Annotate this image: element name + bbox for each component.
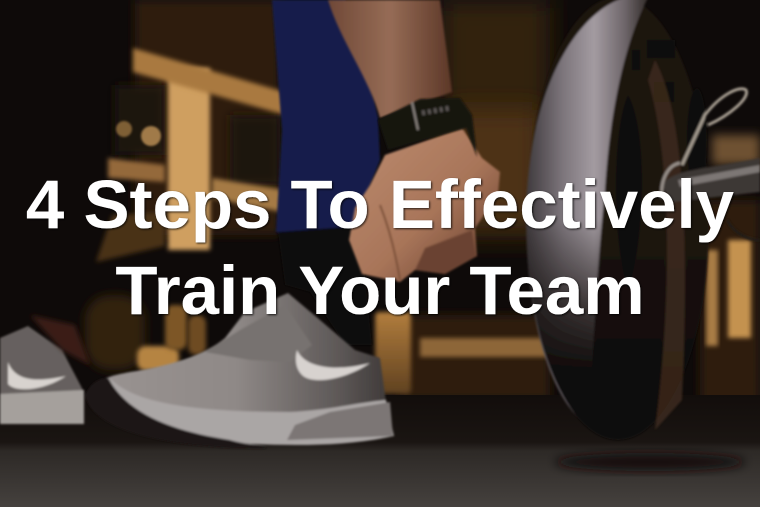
floor <box>0 395 760 507</box>
title line 1: 4 Steps To Effectively <box>26 166 734 243</box>
leg in navy trousers <box>272 0 380 345</box>
left background sneaker <box>0 315 90 424</box>
floor shadow under plate <box>555 453 745 471</box>
background lights: glowing pillars and beams <box>96 48 760 394</box>
title line 2: Train Your Team <box>115 252 645 329</box>
forearm <box>328 0 452 118</box>
weight plate and barbell <box>526 0 760 440</box>
title <box>26 166 734 329</box>
main grey sneaker <box>85 293 394 448</box>
hand gripping bar <box>349 128 500 282</box>
wrist watch <box>378 98 477 157</box>
